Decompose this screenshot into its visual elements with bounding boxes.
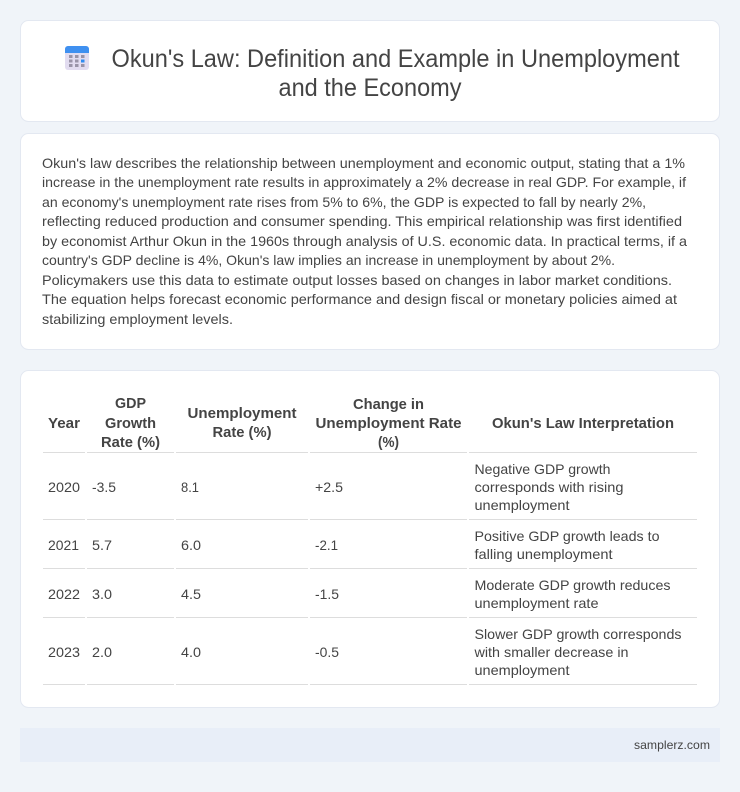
row: 2023: unemployment (474, 662, 570, 678)
title: Okun's Law: Definition and Example in Unemployment (112, 45, 680, 73)
row: 2022: unemployment rate (474, 595, 599, 611)
table header: Unemployment Rate (316, 415, 462, 432)
row: 2022: 2022 (48, 586, 80, 602)
text block: description: Policymakers use this data to estimate output losses based on changes in labor market conditions. (42, 272, 672, 288)
panel: data table (20, 370, 720, 708)
row: 2021: 5.7 (92, 537, 112, 553)
row: 2022: -1.5 (315, 586, 339, 602)
row: 2020: 8.1 (181, 479, 199, 495)
row: 2021: -2.1 (315, 537, 338, 553)
text block: description: country's GDP decline is 4%, Okun's law implies an increase in unemployment by about 2%. (42, 252, 615, 268)
text block: description: reflecting reduced production and consumer spending. This empirical relationship was first identified (42, 213, 682, 229)
row: 2020: 2020 (48, 479, 80, 495)
row: 2020: unemployment (474, 497, 570, 513)
row: 2021: falling unemployment (474, 546, 613, 562)
title (112, 45, 680, 102)
row: 2023: with smaller decrease in (473, 644, 628, 660)
row: 2023: -0.5 (315, 644, 339, 660)
row: 2022: Moderate GDP growth reduces (474, 577, 670, 593)
text block: description: Okun's law describes the relationship between unemployment and economic output, stating that a 1% (42, 155, 685, 171)
row: 2022 (48, 577, 670, 611)
table header: Unemployment (188, 405, 296, 422)
text block: description (42, 155, 687, 327)
text block: description: increase in the unemployment rate results in approximately a 2% decrease in real GDP. For example, if (42, 174, 686, 190)
title: and the Economy (278, 74, 462, 102)
text block: description: stabilizing employment levels. (42, 311, 233, 327)
table header: Change in (353, 396, 424, 413)
table header: Growth (105, 415, 156, 432)
panel: title card (20, 20, 720, 122)
row: 2023: 4.0 (181, 644, 201, 660)
table header (48, 395, 674, 451)
table header: GDP (115, 395, 146, 412)
table header: (%) (378, 434, 399, 451)
row: 2023: Slower GDP growth corresponds (474, 626, 682, 642)
row: 2020: -3.5 (92, 479, 116, 495)
row: 2020: Negative GDP growth (474, 461, 610, 477)
icon: calendar (65, 46, 89, 70)
text block: description: by economist Arthur Okun in the 1960s through analysis of U.S. economic data. In practical terms, if a (42, 233, 687, 249)
row: 2022: 4.5 (181, 586, 201, 602)
table header: Okun's Law Interpretation (492, 415, 674, 432)
table header: Rate (%) (212, 424, 272, 441)
row: 2023: 2.0 (92, 644, 112, 660)
row: 2020 (48, 461, 624, 513)
text block: description: The equation helps forecast economic performance and design fiscal or monetary policies aimed at (42, 291, 677, 307)
footer: samplerz.com (634, 738, 710, 752)
row: 2021: 2021 (48, 537, 79, 553)
row: 2021: Positive GDP growth leads to (474, 528, 660, 544)
row: 2021 (48, 528, 660, 562)
row: 2023 (48, 626, 682, 678)
table header: Rate (%) (101, 434, 160, 451)
table rules (43, 452, 697, 684)
row: 2020: corresponds with rising (474, 479, 624, 495)
row: 2021: 6.0 (181, 537, 201, 553)
row: 2023: 2023 (48, 644, 80, 660)
panel: description (20, 134, 720, 350)
row: 2022: 3.0 (92, 586, 112, 602)
table header: Year (48, 415, 80, 432)
text block: description: an economy's unemployment rate rises from 5% to 6%, the GDP is expected to fall by nearly 2%, (42, 194, 646, 210)
footer (20, 728, 720, 762)
row: 2020: +2.5 (315, 479, 343, 495)
